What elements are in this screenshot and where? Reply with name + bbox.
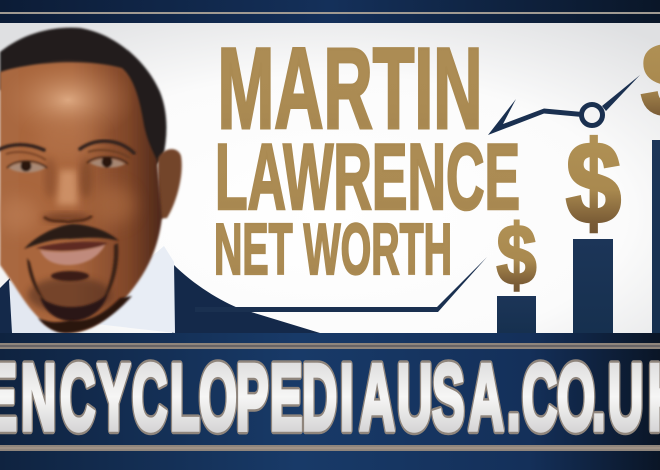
upper trend arrow with ring marker [488, 75, 640, 135]
bar 3 [652, 140, 660, 333]
eyes [6, 150, 130, 172]
dollar sign 2: $ [566, 118, 621, 248]
white central panel [0, 23, 660, 333]
hair [0, 28, 166, 170]
bar 1 [497, 296, 536, 333]
moustache and goatee [24, 224, 119, 321]
lower trend line [195, 257, 487, 312]
jacket [0, 260, 320, 333]
shirt collar [9, 246, 175, 333]
bar chart with dollar signs [496, 22, 660, 333]
bottom navy banner [0, 333, 660, 470]
dollar sign 1: $ [496, 208, 536, 303]
nostrils [44, 216, 92, 222]
face highlights [0, 58, 136, 313]
portrait of man in suit [0, 28, 320, 333]
title: Martin Lawrence Net Worth: NET WORTH [214, 210, 452, 290]
ear [158, 149, 182, 219]
title: Martin Lawrence Net Worth: MARTIN [218, 25, 482, 153]
head and face [0, 62, 162, 333]
title: Martin Lawrence Net Worth [214, 25, 520, 290]
eyebrows [0, 141, 134, 153]
lips [36, 242, 108, 265]
bar 2 [573, 239, 613, 333]
beard under jaw [38, 296, 132, 333]
top navy band [0, 0, 660, 23]
